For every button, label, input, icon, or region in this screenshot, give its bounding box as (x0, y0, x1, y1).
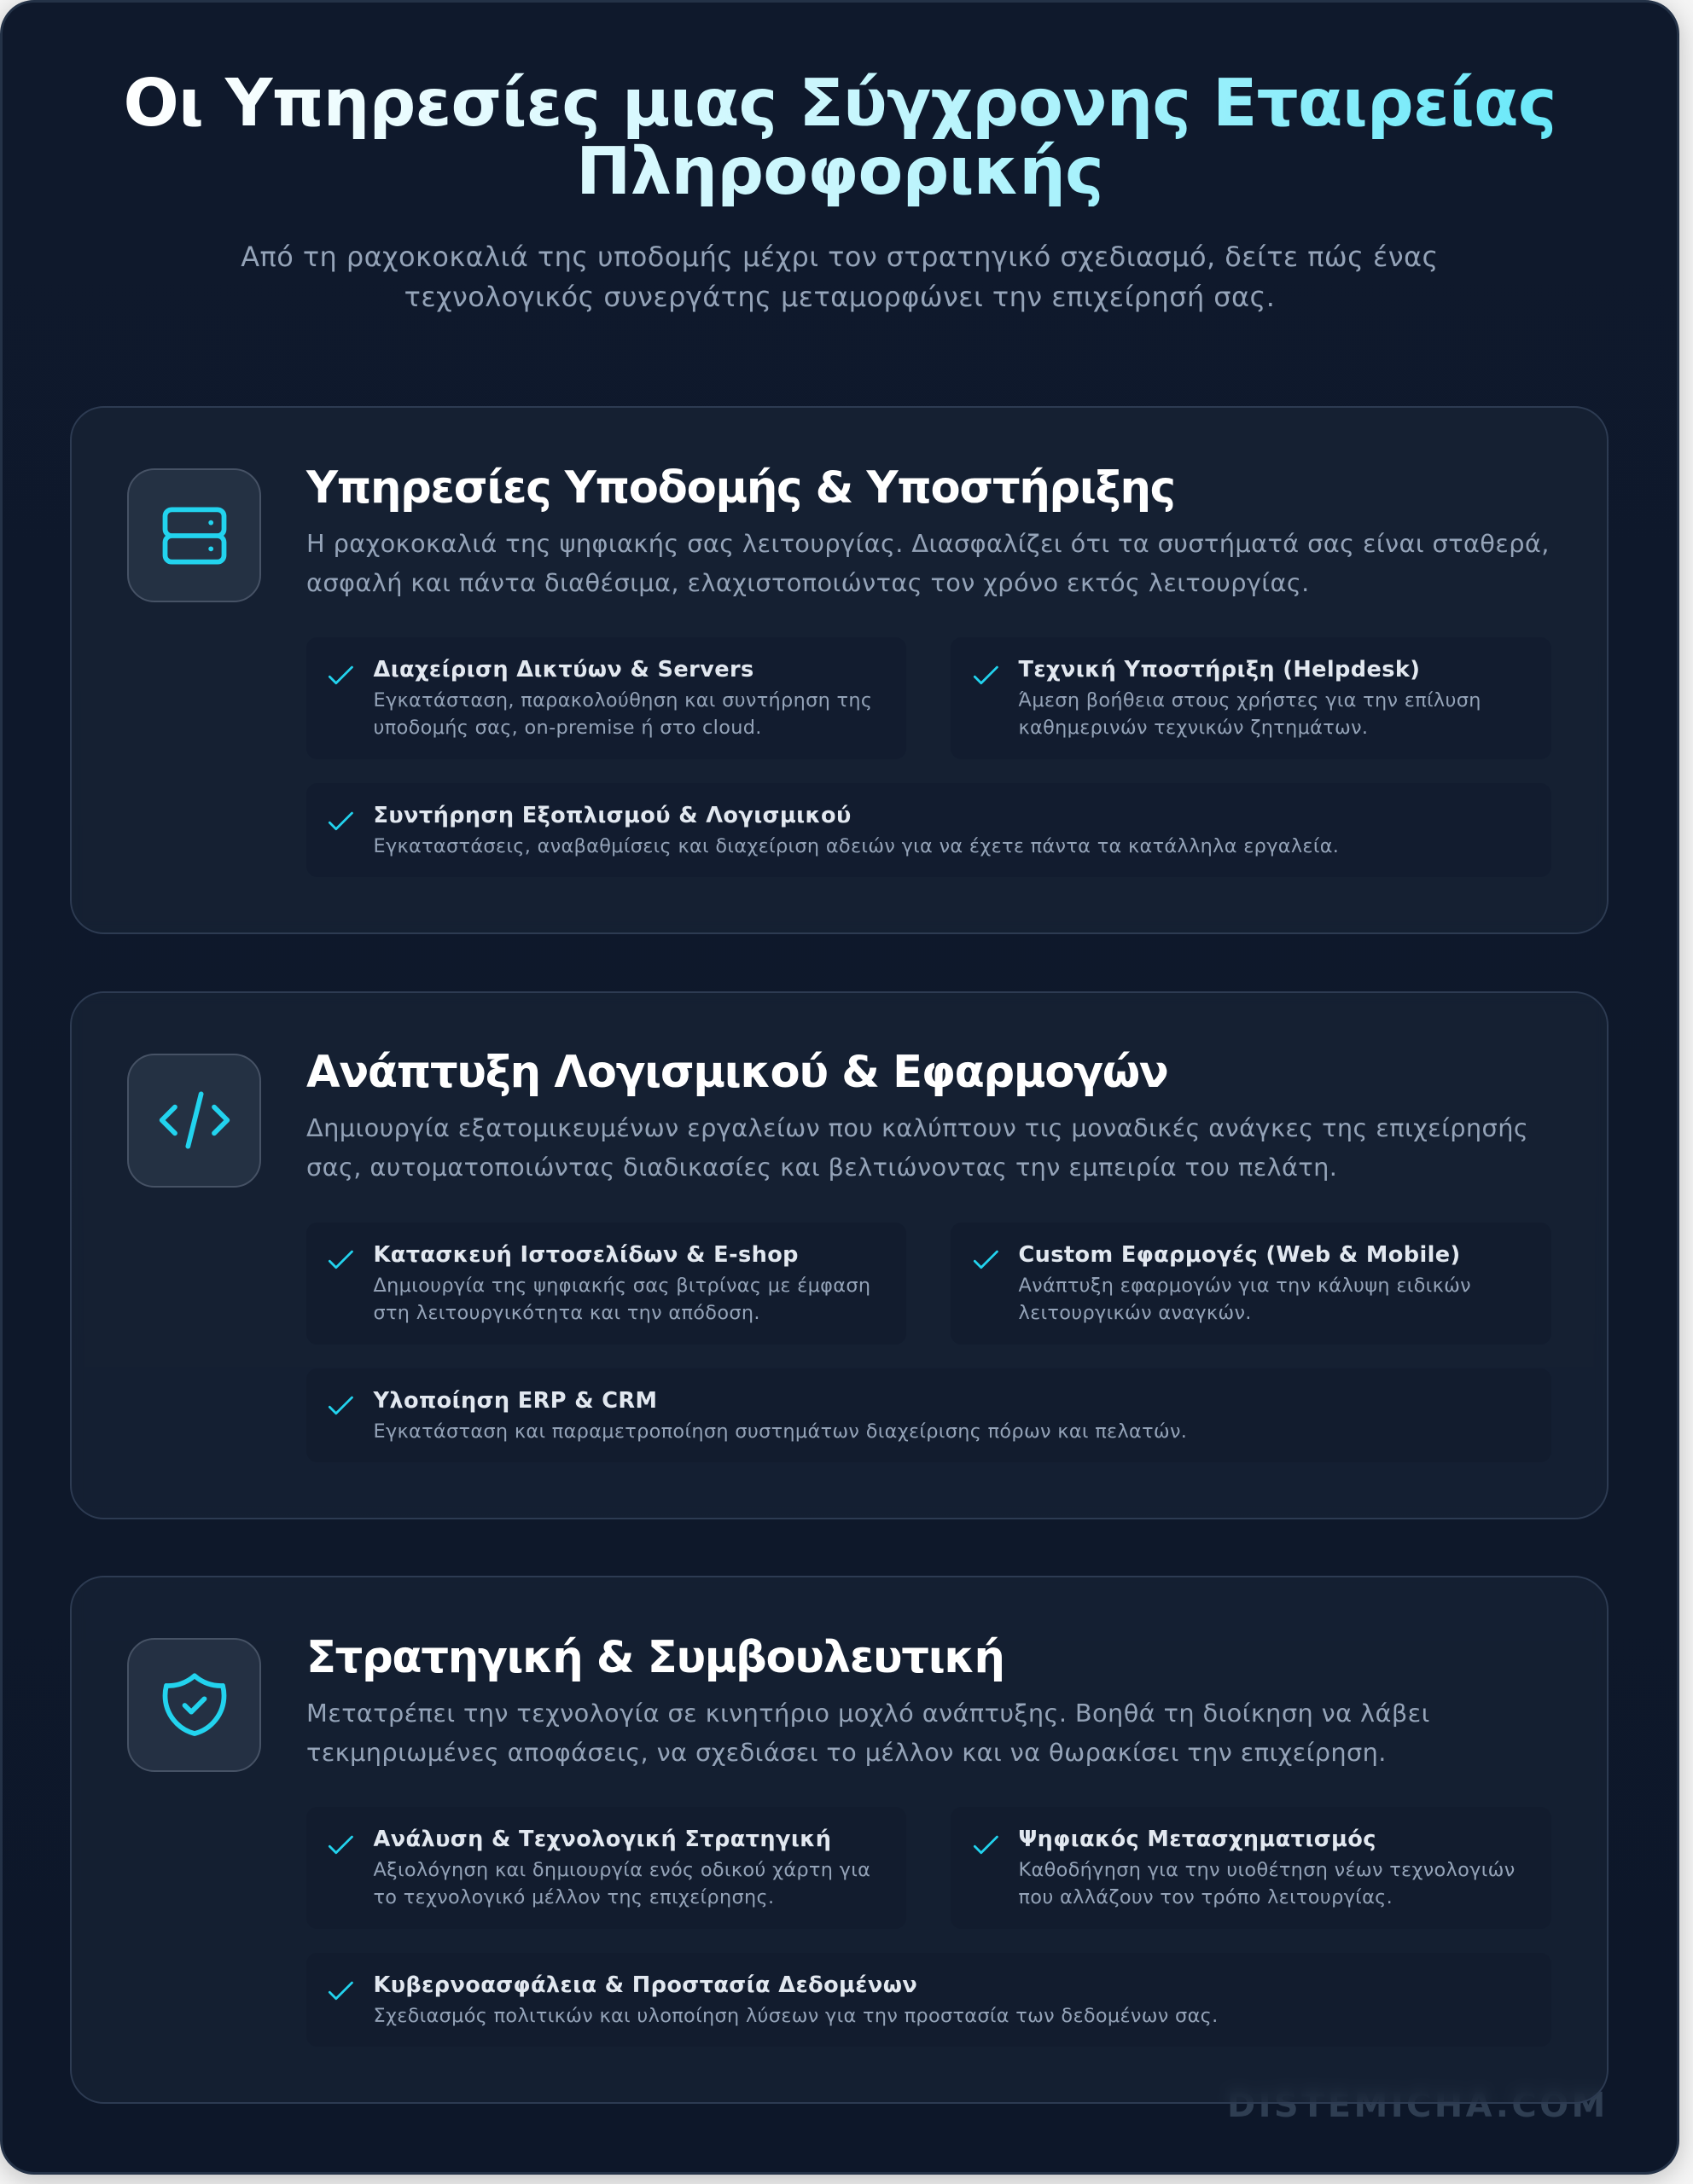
heading: infrastructure: Υπηρεσίες Υποδομής & Υποστήριξης (306, 462, 1175, 514)
item: networks and servers: Εγκατάσταση, παρακολούθηση και συντήρηση της (374, 689, 872, 712)
title: Πληροφορικής (576, 134, 1103, 210)
item: technology strategy (306, 1807, 906, 1929)
item: technology strategy: Αξιολόγηση και δημιουργία ενός οδικού χάρτη για (374, 1859, 870, 1881)
item: networks and servers: Διαχείριση Δικτύων & Servers (374, 657, 754, 682)
watermark: DISTEMICHA.COM (1227, 2086, 1609, 2125)
item: networks and servers: υποδομής σας, on-premise ή στο cloud. (374, 717, 762, 739)
icon: code (127, 1053, 261, 1188)
subtitle: τεχνολογικός συνεργάτης μεταμορφώνει την επιχείρησή σας. (404, 280, 1275, 312)
item: helpdesk (951, 637, 1551, 759)
item: custom applications: Ανάπτυξη εφαρμογών για την κάλυψη ειδικών (1019, 1275, 1471, 1297)
item: digital transformation: Καθοδήγηση για την υιοθέτηση νέων τεχνολογιών (1019, 1859, 1516, 1881)
heading: strategy: Στρατηγική & Συμβουλευτική (306, 1631, 1004, 1682)
panel: infrastructure and support (70, 406, 1609, 934)
icon: shield check (127, 1638, 261, 1772)
description: strategy: Μετατρέπει την τεχνολογία σε κινητήριο μοχλό ανάπτυξης. Βοηθά τη διοίκηση να λάβει (306, 1698, 1430, 1727)
item: helpdesk: Τεχνική Υποστήριξη (Helpdesk) (1019, 657, 1420, 682)
item: cybersecurity: Σχεδιασμός πολιτικών και υλοποίηση λύσεων για την προστασία των δεδομένων σας. (374, 2005, 1219, 2027)
item: technology strategy: Ανάλυση & Τεχνολογική Στρατηγική (374, 1827, 831, 1852)
panel: strategy and consulting (70, 1576, 1609, 2104)
item: websites and e-shop: Κατασκευή Ιστοσελίδων & E-shop (374, 1242, 799, 1268)
item: equipment and software maintenance: Εγκαταστάσεις, αναβαθμίσεις και διαχείριση αδειών για να έχετε πάντα τα κατάλληλα εργαλεία. (374, 835, 1339, 857)
item: equipment and software maintenance (306, 783, 1551, 877)
item: ERP and CRM: Υλοποίηση ERP & CRM (374, 1387, 657, 1413)
item: custom applications (951, 1222, 1551, 1345)
item: technology strategy: το τεχνολογικό μέλλον της επιχείρησης. (374, 1886, 774, 1908)
item: helpdesk: Άμεση βοήθεια στους χρήστες για την επίλυση (1019, 689, 1481, 712)
item: digital transformation: που αλλάζουν τον τρόπο λειτουργίας. (1019, 1886, 1393, 1908)
panel: software development (70, 991, 1609, 1519)
description: software: Δημιουργία εξατομικευμένων εργαλείων που καλύπτουν τις μοναδικές ανάγκες της επιχείρησής (306, 1113, 1528, 1142)
description: strategy (306, 1698, 1430, 1766)
item: equipment and software maintenance: Συντήρηση Εξοπλισμού & Λογισμικού (374, 803, 852, 828)
item: websites and e-shop: Δημιουργία της ψηφιακής σας βιτρίνας με έμφαση (374, 1275, 870, 1297)
item: custom applications: Custom Εφαρμογές (Web & Mobile) (1019, 1242, 1461, 1268)
item: ERP and CRM (306, 1368, 1551, 1462)
description: infrastructure: Η ραχοκοκαλιά της ψηφιακής σας λειτουργίας. Διασφαλίζει ότι τα συστήματά σας είναι σταθερά, (306, 529, 1550, 558)
item: cybersecurity: Κυβερνοασφάλεια & Προστασία Δεδομένων (374, 1972, 917, 1998)
description: software: σας, αυτοματοποιώντας διαδικασίες και βελτιώνοντας την εμπειρία του πελάτη. (306, 1153, 1337, 1182)
item: ERP and CRM: Εγκατάσταση και παραμετροποίηση συστημάτων διαχείρισης πόρων και πελατών. (374, 1420, 1187, 1442)
description: infrastructure: ασφαλή και πάντα διαθέσιμα, ελαχιστοποιώντας τον χρόνο εκτός λειτουργίας. (306, 568, 1310, 597)
item: digital transformation (951, 1807, 1551, 1929)
item: digital transformation: Ψηφιακός Μετασχηματισμός (1019, 1827, 1376, 1852)
heading: software: Ανάπτυξη Λογισμικού & Εφαρμογών (306, 1047, 1168, 1098)
item: websites and e-shop (306, 1222, 906, 1345)
description: software (306, 1113, 1528, 1182)
subtitle: Από τη ραχοκοκαλιά της υποδομής μέχρι τον στρατηγικό σχεδιασμό, δείτε πώς ένας (241, 241, 1439, 273)
icon: server (127, 468, 261, 602)
subtitle (241, 241, 1439, 312)
item: networks and servers (306, 637, 906, 759)
item: helpdesk: καθημερινών τεχνικών ζητημάτων. (1019, 717, 1368, 739)
item: websites and e-shop: στη λειτουργικότητα και την απόδοση. (374, 1302, 760, 1324)
description: strategy: τεκμηριωμένες αποφάσεις, να σχεδιάσει το μέλλον και να θωρακίσει την επιχείρηση. (306, 1737, 1387, 1766)
title (123, 66, 1556, 210)
title: Οι Υπηρεσίες μιας Σύγχρονης Εταιρείας (123, 66, 1556, 142)
item: custom applications: λειτουργικών αναγκών. (1019, 1302, 1252, 1324)
item: cybersecurity (306, 1953, 1551, 2047)
description: infrastructure (306, 529, 1550, 597)
